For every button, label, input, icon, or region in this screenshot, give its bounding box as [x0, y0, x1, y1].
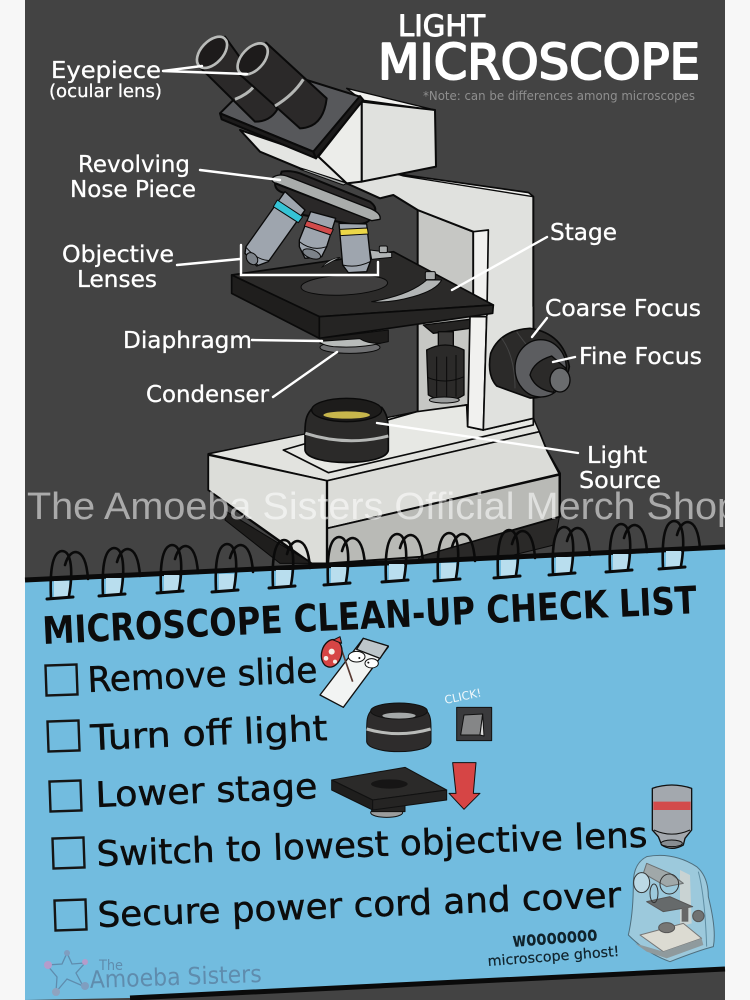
base foot left — [225, 512, 312, 563]
icon: red arrow — [449, 763, 480, 809]
arm — [347, 174, 533, 432]
condenser — [320, 341, 380, 353]
base step — [283, 405, 533, 473]
heading: MICROSCOPE — [378, 34, 700, 91]
icon: slide character — [318, 637, 388, 707]
focus drive cylinder — [427, 345, 464, 401]
watermark: The Amoeba Sisters Official Merch Shop — [27, 486, 739, 528]
part labels: Nose Piece — [70, 177, 196, 203]
right eyepiece tube — [239, 43, 327, 128]
heading: LIGHT — [398, 9, 485, 43]
checklist item: remove slide: Remove slide — [87, 651, 318, 701]
logo: The Amoeba Sisters: Amoeba Sisters — [89, 960, 262, 994]
base foot right — [413, 517, 559, 567]
logo star — [44, 950, 89, 996]
part labels: Coarse Focus — [545, 296, 701, 322]
checklist item: turn off light: Turn off light — [89, 709, 328, 759]
checklist item: secure cord: Secure power cord and cover — [97, 876, 623, 936]
head — [362, 102, 436, 182]
part labels: Fine Focus — [579, 344, 702, 370]
click caption: CLICK! — [443, 685, 483, 707]
heading — [378, 9, 700, 91]
under-stage block — [423, 319, 470, 333]
panel top edge — [25, 547, 725, 580]
stage — [232, 252, 493, 317]
objective lens: red — [299, 212, 336, 258]
part labels: Revolving — [78, 152, 190, 178]
part labels — [49, 58, 702, 494]
checklist item: switch lens: Switch to lowest objective lens — [96, 816, 648, 875]
coarse focus knob — [490, 328, 569, 398]
nose piece — [278, 171, 375, 212]
ghost caption — [487, 921, 620, 970]
part labels: Objective — [62, 242, 174, 268]
diaphragm — [319, 339, 380, 347]
stage clips — [322, 257, 340, 267]
ghost caption: microscope ghost! — [487, 944, 620, 970]
checklist icons — [318, 637, 714, 962]
focus knobs — [490, 328, 570, 398]
panel bottom edge — [130, 969, 725, 998]
base — [208, 405, 560, 563]
label leader lines — [163, 66, 578, 453]
note: *Note: can be differences among microscopes — [423, 89, 695, 103]
inner arm panel — [418, 210, 473, 417]
logo: The Amoeba Sisters — [44, 950, 262, 996]
spiral binding — [47, 521, 700, 599]
part labels: Light — [587, 443, 647, 469]
part labels: Lenses — [77, 267, 157, 293]
microscope upper body: arm, head, eyepieces, nose piece, objectives, stage — [191, 31, 533, 432]
ghost caption: wooooooo — [512, 921, 598, 952]
microscope lower body: condenser, focus drive, light, base — [208, 307, 560, 567]
objective lens: teal — [245, 192, 305, 266]
icon: objective lens — [652, 785, 692, 848]
part labels: Source — [579, 468, 661, 494]
fine focus knob — [530, 356, 566, 392]
checklist item: lower stage: Lower stage — [95, 767, 318, 816]
blue checklist panel — [25, 547, 725, 1000]
light source — [305, 407, 388, 462]
under-stage dark mount — [320, 330, 388, 343]
icon: microscope ghost — [628, 855, 714, 962]
microscope illustration — [191, 31, 560, 567]
part labels: Stage — [550, 220, 617, 246]
part labels: (ocular lens) — [49, 81, 162, 102]
objective lens: yellow — [339, 223, 371, 273]
binocular plate — [220, 80, 360, 152]
logo: The Amoeba Sisters: The — [98, 958, 123, 974]
part labels: Diaphragm — [123, 328, 252, 354]
left eyepiece tube — [199, 37, 277, 122]
icon: small stage — [332, 767, 447, 817]
icon: light source — [367, 703, 431, 752]
icon: light switch — [457, 707, 492, 741]
part labels: Eyepiece — [51, 58, 161, 84]
part labels: Condenser — [146, 382, 270, 408]
